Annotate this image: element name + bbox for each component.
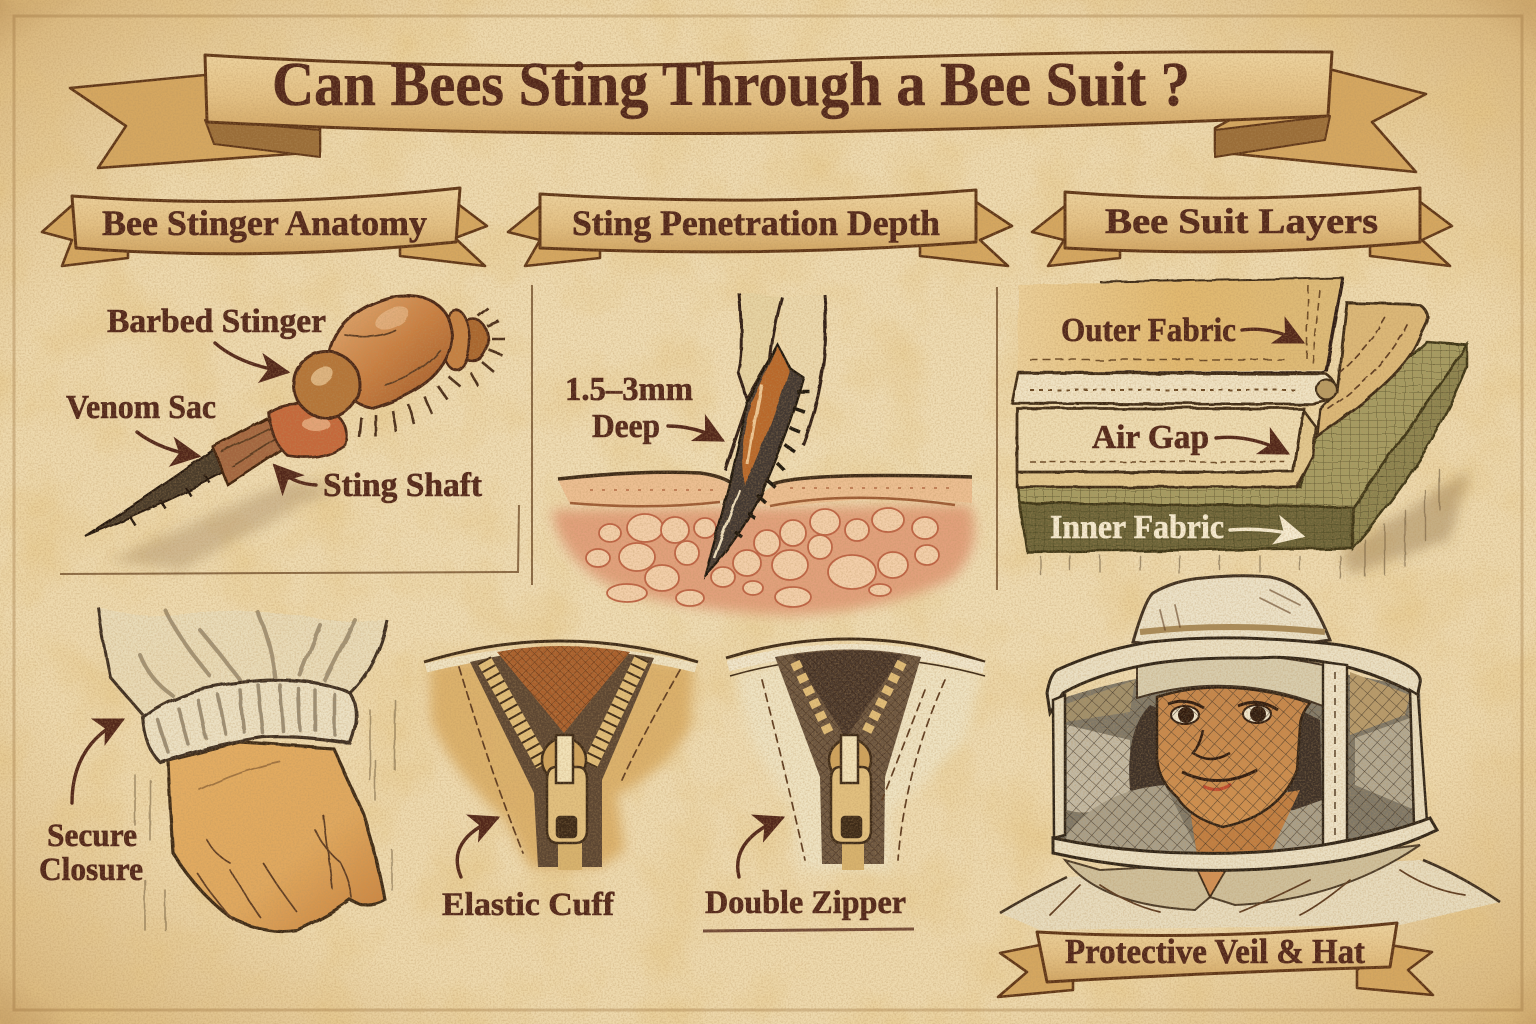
zipper pull bbox=[829, 735, 871, 843]
skin cells bbox=[586, 508, 939, 607]
panel: bee stinger illustration bbox=[85, 296, 504, 570]
illustration: second zipper bbox=[726, 639, 985, 870]
suit shoulders bbox=[1000, 860, 1500, 930]
label: air gap bbox=[1092, 419, 1287, 456]
title banner bbox=[70, 51, 1426, 172]
panel: bee suit fabric layers bbox=[1012, 278, 1470, 578]
veil side frames bbox=[1053, 690, 1427, 838]
abdomen tip bbox=[442, 310, 488, 370]
heading: protective veil and hat: Protective Veil & Hat bbox=[1065, 932, 1365, 971]
label: outer fabric: Outer Fabric bbox=[1061, 312, 1236, 349]
abdomen bbox=[328, 296, 452, 408]
label: venom sac: Venom Sac bbox=[66, 389, 216, 426]
outer fabric layer bbox=[1012, 278, 1343, 404]
hat underside brim bbox=[1137, 655, 1323, 706]
heading: bee stinger anatomy bbox=[42, 188, 487, 266]
air gap layer bbox=[1017, 408, 1316, 487]
sleeve bbox=[98, 607, 387, 715]
lower bulb bbox=[268, 404, 346, 458]
veil lower hoop bbox=[1053, 818, 1437, 870]
illustration: elastic cuff and fist bbox=[98, 607, 395, 931]
title text: Can Bees Sting Through a Bee Suit ? bbox=[272, 51, 1190, 119]
heading: bee suit layers: Bee Suit Layers bbox=[1105, 201, 1378, 241]
knit cuff band bbox=[143, 680, 356, 762]
label: double zipper bbox=[705, 818, 906, 921]
face bbox=[1157, 687, 1310, 827]
fist bbox=[168, 742, 385, 931]
bristles bbox=[360, 308, 504, 438]
zipper pull bbox=[542, 735, 587, 843]
label: elastic cuff: Elastic Cuff bbox=[442, 887, 615, 923]
heading: sting penetration depth bbox=[508, 190, 1012, 266]
label: secure closure: Secure bbox=[47, 818, 137, 854]
veil mesh bbox=[1055, 667, 1425, 851]
veil interior bbox=[1055, 667, 1425, 851]
icon: stinger piercing skin bbox=[705, 293, 826, 575]
heading: bee suit layers bbox=[1032, 188, 1452, 266]
label: 1.5–3mm deep: 1.5–3mm bbox=[565, 371, 693, 408]
middle sac bbox=[294, 352, 360, 418]
label: secure closure: Closure bbox=[39, 852, 143, 888]
collar under veil bbox=[1065, 785, 1322, 855]
label: venom sac bbox=[66, 389, 216, 456]
illustration: beekeeper veil and hat bbox=[1000, 576, 1500, 930]
label: barbed stinger: Barbed Stinger bbox=[107, 303, 326, 340]
hat crown bbox=[1133, 576, 1330, 648]
label: elastic cuff bbox=[442, 818, 615, 923]
zipper teeth bbox=[484, 658, 642, 870]
panel dividers bbox=[60, 285, 997, 931]
heading: protective veil and hat bbox=[998, 923, 1433, 997]
veil vertical strap bbox=[1323, 662, 1347, 845]
sting shaft bbox=[213, 418, 284, 485]
zipper teeth bbox=[795, 662, 902, 870]
neck bbox=[1190, 790, 1300, 855]
sting core bbox=[705, 345, 804, 575]
label: sting shaft: Sting Shaft bbox=[323, 467, 483, 504]
illustration: first zipper bbox=[424, 641, 698, 870]
label: secure closure bbox=[39, 720, 143, 888]
heading: bee stinger anatomy: Bee Stinger Anatomy bbox=[102, 203, 427, 243]
veil upper hoop bbox=[1047, 638, 1420, 713]
label: barbed stinger bbox=[107, 303, 326, 372]
label: 1.5–3mm deep: Deep bbox=[592, 408, 660, 445]
label: air gap: Air Gap bbox=[1092, 419, 1209, 456]
label: inner fabric: Inner Fabric bbox=[1050, 509, 1224, 546]
label: 1.5–3mm deep bbox=[565, 371, 722, 445]
heading: sting penetration depth: Sting Penetration Depth bbox=[572, 203, 940, 243]
inner fabric layer bbox=[1018, 342, 1467, 552]
hair bbox=[1129, 705, 1322, 810]
spike with barbs bbox=[85, 450, 233, 536]
tan flap bbox=[1317, 303, 1428, 437]
panel: skin cross-section bbox=[552, 472, 974, 615]
label: double zipper: Double Zipper bbox=[705, 885, 906, 921]
